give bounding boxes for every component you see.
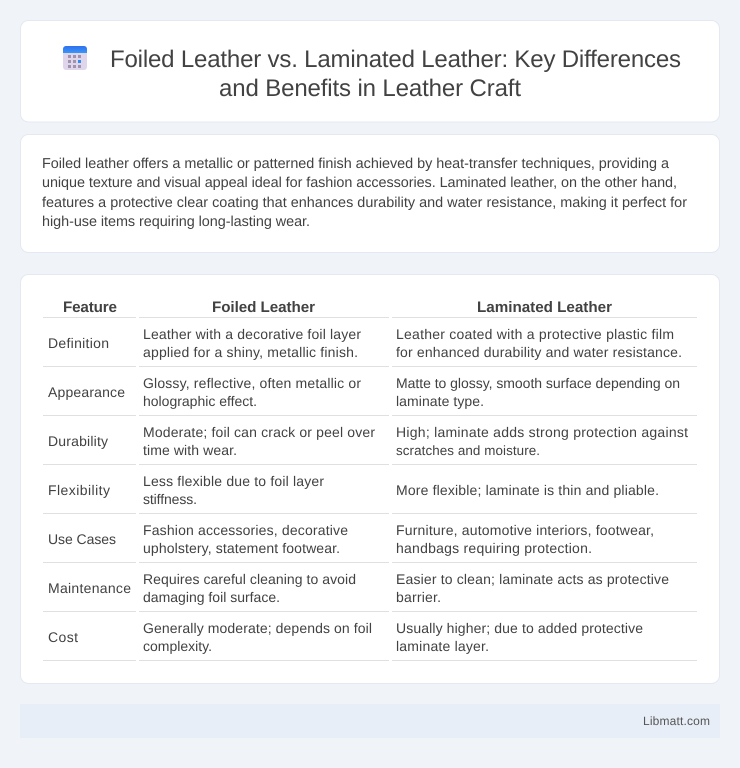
row: definition xyxy=(48,326,682,360)
icon: calendar xyxy=(63,46,87,70)
panel: introduction xyxy=(20,134,720,252)
row: use cases: handbags requiring protection. xyxy=(396,540,592,556)
row: cost xyxy=(48,620,643,654)
row: definition: applied for a shiny, metallic finish. xyxy=(143,344,358,360)
row: durability xyxy=(48,424,688,458)
row: appearance: laminate type. xyxy=(396,393,484,409)
footer text: Libmatt.com xyxy=(643,714,710,728)
row: use cases: Use Cases xyxy=(48,531,116,547)
row: use cases xyxy=(48,522,654,556)
row: definition: for enhanced durability and water resistance. xyxy=(396,344,682,360)
table header: Foiled Leather xyxy=(212,299,315,316)
text block: introduction: high-use items requiring long-lasting wear. xyxy=(42,214,310,230)
row: maintenance: Maintenance xyxy=(48,580,131,596)
panel: title card xyxy=(20,20,720,122)
row: definition: Leather coated with a protective plastic film xyxy=(396,326,674,342)
row: flexibility: Less flexible due to foil layer xyxy=(143,473,324,489)
row: use cases: Fashion accessories, decorative xyxy=(143,522,348,538)
row: durability: Moderate; foil can crack or peel over xyxy=(143,424,375,440)
title xyxy=(110,46,681,102)
text block: introduction: Foiled leather offers a metallic or patterned finish achieved by heat-transfer techniques, providing a xyxy=(42,156,669,172)
text block: introduction: features a protective clear coating that enhances durability and water resistance, making it perfect for xyxy=(42,195,687,211)
row: use cases: Furniture, automotive interiors, footwear, xyxy=(396,522,654,538)
row: cost: Cost xyxy=(48,629,78,645)
row: durability: scratches and moisture. xyxy=(396,443,540,458)
row: flexibility: More flexible; laminate is thin and pliable. xyxy=(396,482,659,498)
title: Foiled Leather vs. Laminated Leather: Key Differences xyxy=(110,46,681,73)
row: cost: complexity. xyxy=(143,638,212,654)
table header: Laminated Leather xyxy=(477,299,612,316)
row: maintenance: Easier to clean; laminate acts as protective xyxy=(396,571,669,587)
row: flexibility xyxy=(48,473,659,507)
row: maintenance: damaging foil surface. xyxy=(143,589,280,605)
row: maintenance xyxy=(48,571,669,605)
row: maintenance: Requires careful cleaning to avoid xyxy=(143,571,356,587)
row: definition: Leather with a decorative foil layer xyxy=(143,326,361,342)
row: durability: Durability xyxy=(48,433,108,449)
row: cost: laminate layer. xyxy=(396,638,489,654)
row: durability: time with wear. xyxy=(143,442,237,458)
row: cost: Generally moderate; depends on foil xyxy=(143,620,372,636)
footer bar xyxy=(20,704,720,738)
row: appearance xyxy=(48,375,680,409)
table header: Feature xyxy=(63,299,117,316)
row: definition: Definition xyxy=(48,335,109,351)
row: appearance: Matte to glossy, smooth surface depending on xyxy=(396,375,680,391)
row: appearance: Appearance xyxy=(48,384,125,400)
text block: introduction: unique texture and visual appeal ideal for fashion accessories. Laminated leather, on the other hand, xyxy=(42,175,677,191)
row: maintenance: barrier. xyxy=(396,589,441,605)
row: durability: High; laminate adds strong protection against xyxy=(396,424,688,440)
row: use cases: upholstery, statement footwear. xyxy=(143,540,340,556)
row: appearance: Glossy, reflective, often metallic or xyxy=(143,375,361,391)
text block: introduction xyxy=(42,156,687,230)
row: flexibility: stiffness. xyxy=(143,491,197,507)
title: and Benefits in Leather Craft xyxy=(219,75,521,102)
panel: comparison table xyxy=(20,274,720,684)
row: appearance: holographic effect. xyxy=(143,393,257,409)
row: cost: Usually higher; due to added protective xyxy=(396,620,643,636)
table header xyxy=(63,299,612,316)
row: flexibility: Flexibility xyxy=(48,482,110,498)
